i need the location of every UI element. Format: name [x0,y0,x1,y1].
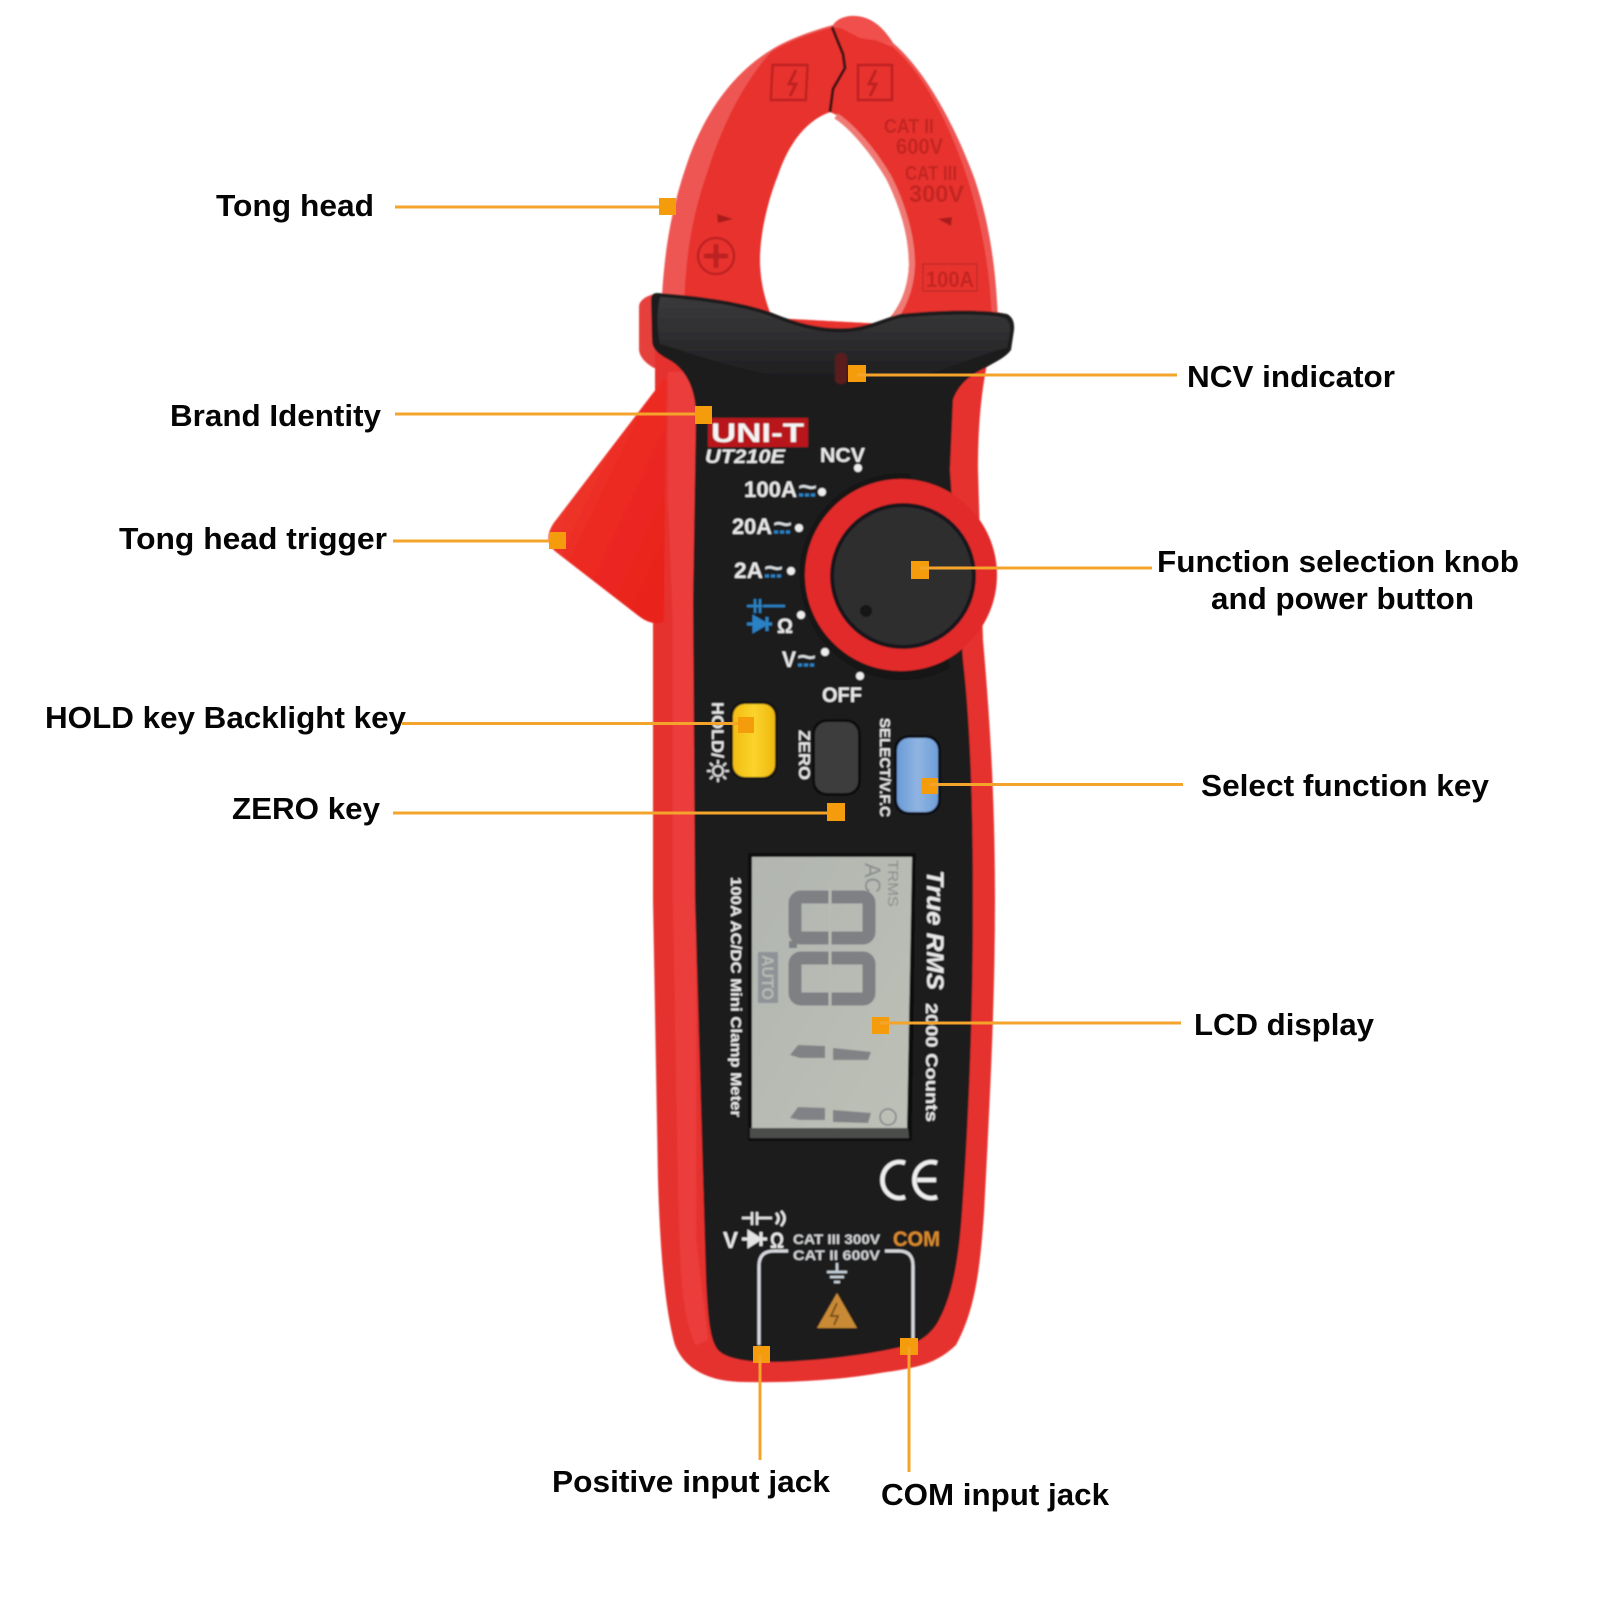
LCD display [748,853,916,1141]
rating text on jaw: CAT II [884,116,934,138]
callout: ZERO key: ZERO key [232,791,381,826]
callout: Positive input jack: Positive input jack [552,1464,831,1499]
rating text on jaw: CAT III [905,163,957,185]
LCD display: TRMS [884,860,901,907]
HOLD key: HOLD/ [708,702,727,758]
callout: COM input jack: COM input jack [881,1477,1110,1512]
callout: LCD display [872,1007,1375,1042]
dial labels: 20A [732,514,772,539]
callout: NCV indicator: NCV indicator [1187,359,1395,394]
faceplate side text [727,870,948,1122]
rating text on jaw: 300V [909,181,964,208]
input jack markings: Ω [770,1228,784,1253]
callout: Positive input jack [552,1346,831,1499]
callout: NCV indicator [848,359,1395,394]
faceplate side text: True RMS [921,870,948,990]
dial labels: ~ [797,644,816,671]
dial labels: 100A [744,477,797,502]
dial labels: ~ [798,474,817,501]
SELECT key [876,718,941,817]
black collar highlight [658,297,1010,387]
callout: Brand Identity [170,398,712,433]
rating text on jaw: 100A [926,267,974,292]
callout: COM input jack [881,1338,1110,1512]
input jack markings: CAT II 600V [793,1247,881,1263]
SELECT key: SELECT/V.F.C [876,718,893,817]
callout: Tong head [216,188,676,223]
tong head [639,16,998,368]
callout: Function selection knob: and power button [1211,581,1474,616]
rating text on jaw [884,116,977,292]
input jack markings: V [723,1227,739,1253]
callout: HOLD key Backlight key: HOLD key Backlight key [45,700,407,735]
callout: Tong head trigger: Tong head trigger [119,521,387,556]
callout: Tong head: Tong head [216,188,374,223]
screw mark and triangle [698,214,734,274]
dial labels: NCV [820,445,866,467]
LCD display: AUTO [758,955,777,1000]
input jack markings [723,1211,940,1345]
tong head trigger [548,376,666,623]
HOLD key [707,701,778,782]
callout: Brand Identity: Brand Identity [170,398,382,433]
dial labels [732,445,866,707]
LCD display: AC [860,863,885,893]
input jack markings: COM [893,1228,940,1251]
dial labels: ~ [773,511,792,538]
brand logo: UT210E [705,447,787,468]
callout: HOLD key Backlight key [45,700,754,735]
ZERO key: ZERO [795,730,812,780]
body highlight strips [668,372,708,1345]
callout: Select function key [922,768,1490,803]
rating text on jaw: 600V [896,134,943,159]
ZERO key [795,719,861,796]
brand logo [705,418,808,468]
warning triangle [817,1293,857,1328]
callout: Function selection knob [911,544,1519,616]
faceplate side text: 100A AC/DC Mini Clamp Meter [727,877,744,1117]
CE mark [882,1162,937,1198]
body shell [653,350,995,1382]
dial labels: ~ [764,555,783,582]
LCD digits [795,897,869,999]
dial labels: Ω [777,615,793,638]
callout: Function selection knob: Function selection knob [1157,544,1519,579]
callout: Tong head trigger [119,521,566,556]
callout: LCD display: LCD display [1194,1007,1375,1042]
clamp meter [548,16,1014,1382]
callout: Select function key: Select function key [1201,768,1490,803]
lightning boxes [771,65,892,100]
brand logo: UNI-T [711,418,805,448]
input jack markings: CAT III 300V [793,1231,881,1247]
function selection knob [800,474,997,680]
callout: ZERO key [232,791,845,826]
dial labels: V [782,647,796,672]
black faceplate [651,293,1014,1362]
NCV indicator [835,353,847,384]
faceplate side text: 2000 Counts [922,1003,941,1122]
dial labels: OFF [822,684,862,707]
dial labels: 2A [734,558,763,583]
